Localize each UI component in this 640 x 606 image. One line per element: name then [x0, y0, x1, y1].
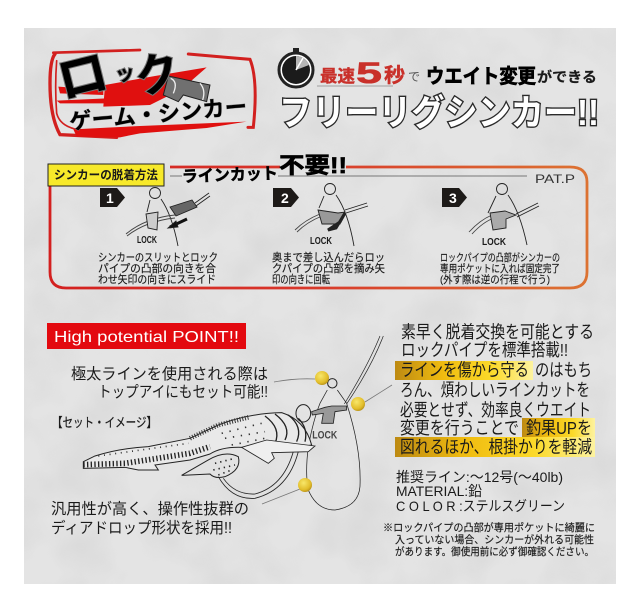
step 1 text — [98, 251, 218, 286]
step 2 text: クパイプの凸部を摘み矢 — [272, 261, 385, 275]
step 2 badge: 2 — [281, 190, 289, 206]
step 3 badge: 3 — [449, 190, 457, 206]
logo pipe icon — [163, 76, 210, 102]
step 1 text: シンカーのスリットとロック — [98, 251, 218, 264]
leader line: lock pipe — [365, 385, 392, 402]
step 3 text: ロックパイプの凸部がシンカーの — [440, 251, 560, 264]
step 3 text: 専用ポケットに入れば固定完了 — [440, 263, 560, 275]
logo red brush strokes — [57, 67, 247, 137]
step 3 illustration — [469, 184, 539, 248]
description lines: ラインを傷から守る — [400, 360, 529, 380]
sinker outline — [307, 390, 360, 510]
lure tail and body — [83, 413, 312, 470]
description lines — [400, 322, 594, 457]
description lines: 変更を行うことで — [400, 418, 519, 438]
headline: fastest 5 seconds: 最速 — [320, 67, 355, 86]
marker dot: lock pipe — [351, 397, 365, 411]
headline: free rig sinker: フリーリグシンカー!! — [279, 92, 599, 133]
description lines: 必要とせず、効率良くウエイト — [400, 400, 591, 420]
icon: stopwatch — [279, 48, 313, 87]
heading: high potential point — [47, 323, 246, 349]
footnote: があります。御使用前に必ず御確認ください。 — [395, 545, 594, 558]
caption: set image: 【セット・イメージ】 — [52, 415, 157, 430]
leader line: top eye — [274, 379, 315, 382]
step 1 illustration: LOCK — [137, 235, 158, 246]
lure speckles — [98, 423, 265, 456]
lure tail segments — [83, 447, 210, 465]
logo heading line 1 — [52, 44, 185, 110]
lure eye ring — [296, 405, 311, 422]
step 1 badge: 1 — [106, 190, 114, 206]
product specs: 推奨ライン:〜12号(〜40lb) — [396, 469, 563, 485]
callout: teardrop shape: 汎用性が高く、操作性抜群の — [51, 500, 249, 518]
step 3 text: (外す際は逆の行程で行う) — [440, 273, 550, 286]
logo heading line 1: ロ — [52, 44, 114, 110]
description lines: 図れるほか、根掛かりを軽減 — [400, 437, 592, 457]
yellow label — [48, 164, 164, 186]
logo heading line 2: ゲーム・シンカー — [68, 94, 248, 134]
headline: fastest 5 seconds: 5 — [356, 57, 382, 90]
lure body bands — [265, 414, 306, 443]
heading: high potential point: High potential POINT!! — [54, 329, 239, 346]
callout: teardrop shape — [51, 500, 249, 537]
marker dot: teardrop — [298, 478, 312, 492]
patent mark: PAT.P — [535, 172, 575, 186]
sinker eye — [328, 379, 337, 388]
lock mark: LOCK — [312, 430, 338, 442]
logo: rock game sinker — [50, 44, 255, 137]
heading: no line cut needed: 不要!! — [279, 153, 347, 178]
heading: no line cut needed: ラインカット — [182, 165, 278, 186]
headline: fastest 5 seconds: ウエイト変更 — [426, 65, 536, 88]
callout: teardrop shape: ディアドロップ形状を採用!! — [51, 518, 232, 537]
headline: fastest 5 seconds: 秒 — [384, 64, 405, 87]
step 3 illustration: LOCK — [482, 237, 507, 248]
description lines: のはもち — [535, 360, 592, 380]
description lines: ロックパイプを標準搭載!! — [401, 340, 568, 360]
headline: fastest 5 seconds: ができる — [537, 69, 597, 85]
headline: fastest 5 seconds: で — [408, 70, 420, 84]
lure claw — [182, 454, 239, 478]
step 2 illustration: LOCK — [310, 236, 333, 247]
description lines: ろん、煩わしいラインカットを — [400, 380, 590, 400]
marker dot: top eye — [315, 371, 329, 385]
highlight bars — [395, 361, 595, 457]
footnote: 入っていない場合、シンカーが外れる可能性 — [395, 533, 594, 546]
step 1 illustration — [126, 188, 210, 246]
panel frame — [50, 167, 587, 288]
lock pipe on sinker — [312, 406, 347, 423]
step 3 badge — [442, 188, 467, 207]
fishing line — [344, 336, 383, 404]
callout: top eye: トップアイにもセット可能!! — [98, 383, 268, 401]
step 2 text: 奥まで差し込んだらロッ — [272, 250, 385, 264]
callout: top eye: 極太ラインを使用される際は — [71, 365, 268, 383]
footnote — [383, 521, 595, 558]
step 1 badge — [100, 188, 125, 207]
callout: top eye — [71, 365, 268, 401]
step 1 text: わせ矢印の向きにスライド — [98, 272, 216, 286]
product specs: MATERIAL:鉛 — [396, 483, 482, 499]
description lines: 素早く脱着交換を可能とする — [401, 322, 594, 342]
illustration: crawfish lure on sinker — [83, 336, 383, 510]
leader line: teardrop — [262, 489, 300, 504]
logo brush frame — [50, 50, 255, 137]
panel: how to attach the sinker — [48, 153, 587, 288]
product specs — [396, 469, 565, 514]
lure back ridge — [190, 417, 248, 438]
logo heading line 1: ク — [129, 44, 185, 105]
step 2 text — [272, 250, 385, 286]
product specs: C O L O R :ステルスグリーン — [396, 498, 565, 514]
step 2 badge — [273, 188, 299, 207]
right description text — [395, 322, 595, 457]
step 1 text: パイプの凸部の向きを合 — [98, 261, 216, 275]
footnote: ※ロックパイプの凸部が専用ポケットに綺麗に — [383, 521, 595, 534]
logo heading line 1: ッ — [114, 62, 136, 87]
description lines: 釣果UPを — [526, 418, 592, 438]
yellow label: シンカーの脱着方法 — [54, 167, 158, 182]
headline: fastest 5 seconds — [317, 57, 597, 90]
step 2 text: 印の向きに回転 — [272, 272, 330, 286]
heading: no line cut needed — [182, 153, 347, 186]
lure claw speckles — [213, 458, 235, 475]
step 3 text — [440, 251, 560, 286]
step 2 illustration — [295, 184, 368, 247]
lure hook — [218, 452, 298, 498]
hook shank — [242, 440, 315, 463]
